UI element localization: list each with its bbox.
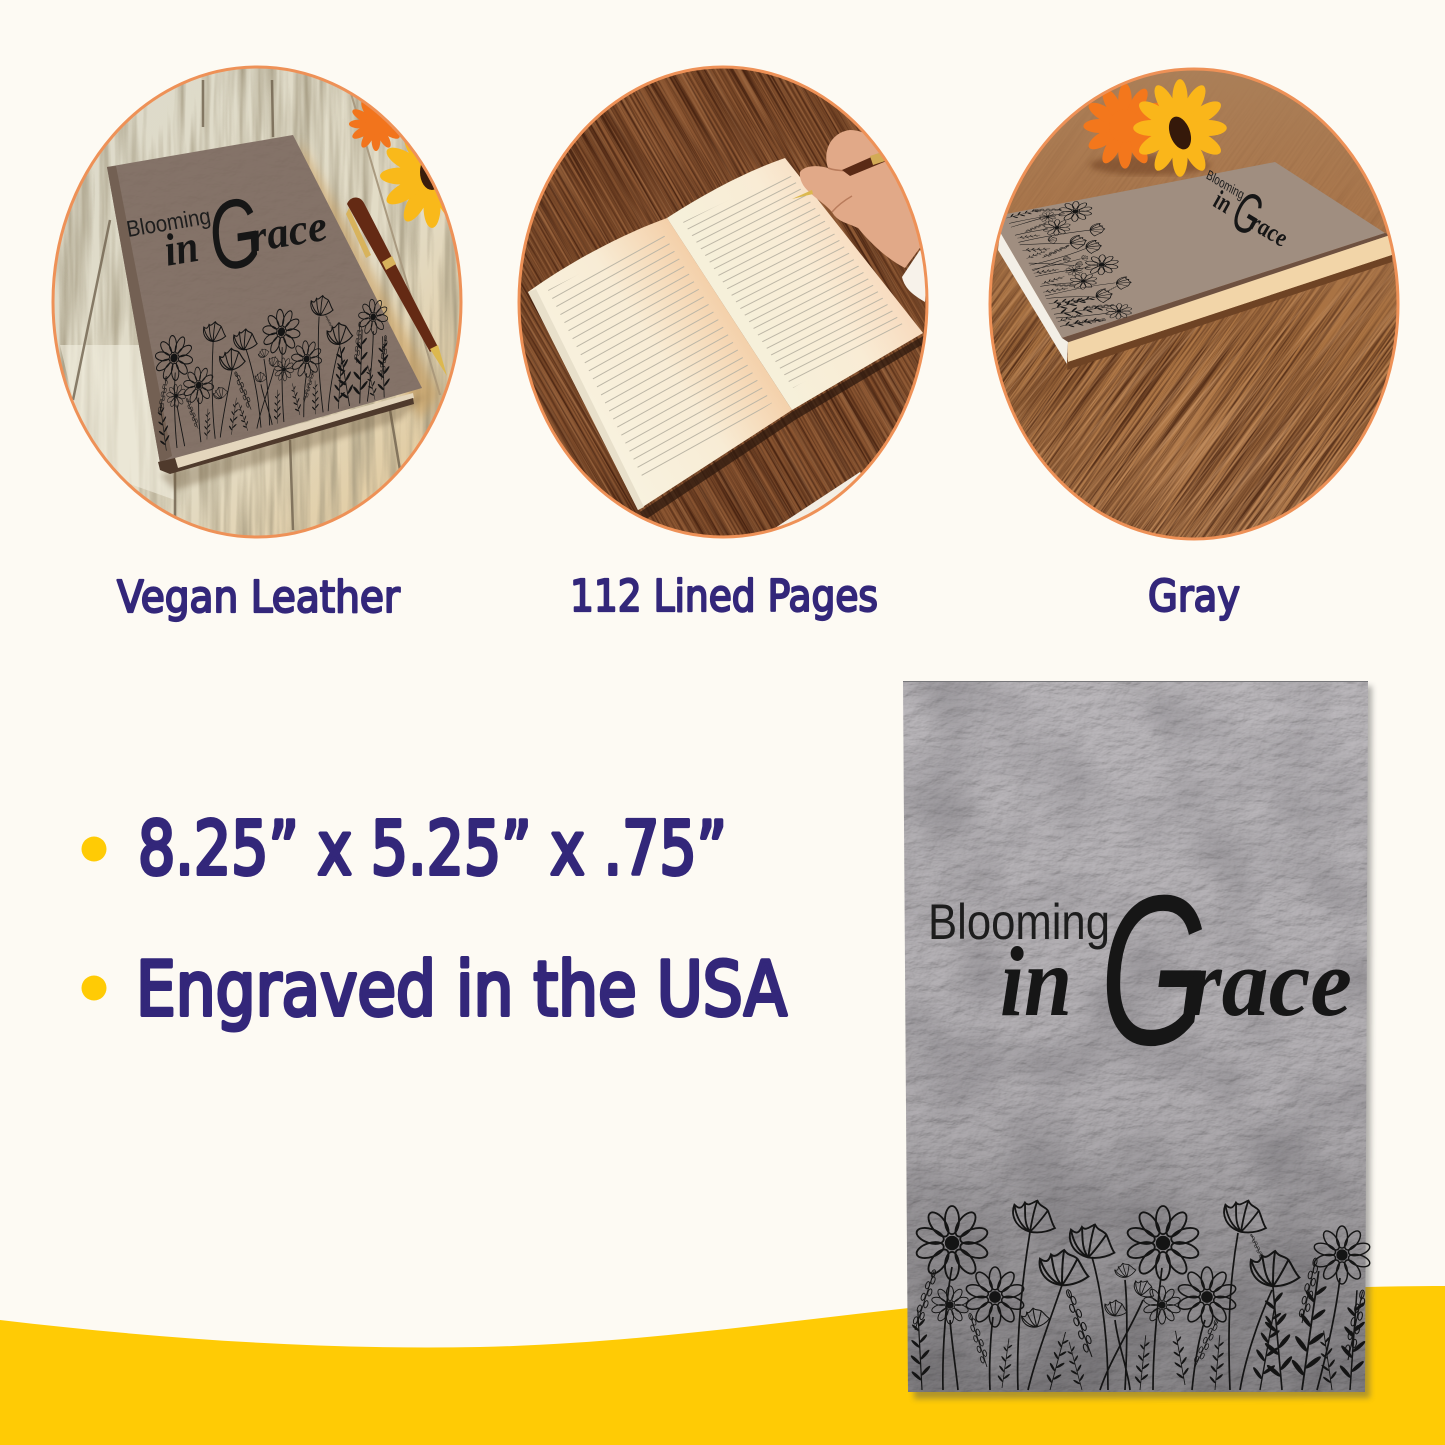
bullet: dimensions: 8.25” x 5.25” x .75” xyxy=(138,806,727,892)
cover title: race xyxy=(1185,929,1352,1036)
icon: hand holding pen xyxy=(792,130,928,302)
cover text: in xyxy=(1210,185,1235,220)
cover title: G xyxy=(1100,851,1208,1090)
ellipse outline xyxy=(53,67,461,537)
cover text: Blooming xyxy=(124,203,213,242)
cover flowers xyxy=(155,295,390,451)
cover text: G xyxy=(1225,177,1270,250)
caption: gray: Gray xyxy=(1148,571,1240,622)
caption: 112 lined pages: 112 Lined Pages xyxy=(570,571,878,622)
cover flowers xyxy=(1006,201,1132,328)
bullet: engraved in the USA: Engraved in the USA xyxy=(136,945,787,1033)
book: gray journal closed xyxy=(998,157,1392,370)
panel: lined pages photo xyxy=(518,66,928,538)
icon: orange flower xyxy=(1083,79,1227,177)
cover title: in xyxy=(1000,926,1072,1037)
leather cover xyxy=(903,681,1368,1392)
cover text: G xyxy=(200,176,269,292)
cover text xyxy=(127,198,326,269)
carpet corner xyxy=(776,472,861,528)
book: open lined journal xyxy=(528,158,923,510)
cover text: Blooming xyxy=(1204,167,1246,203)
cover text: race xyxy=(246,201,331,262)
panel: vegan leather photo xyxy=(50,60,484,540)
main gray journal xyxy=(903,681,1372,1399)
ellipse outline xyxy=(519,67,927,537)
cover title xyxy=(928,851,1352,1090)
ellipse outline xyxy=(990,69,1398,539)
cover text: race xyxy=(1247,207,1291,254)
cover title: Blooming xyxy=(928,894,1110,950)
cover text: in xyxy=(160,220,202,275)
cover wildflowers xyxy=(907,1197,1371,1392)
caption: vegan leather: Vegan Leather xyxy=(117,572,401,623)
icon: sunflower xyxy=(349,102,444,228)
book: brown leather journal xyxy=(100,130,430,474)
panel: gray colour photo xyxy=(988,68,1400,540)
icon: pen xyxy=(346,197,447,376)
yellow wave band xyxy=(0,1286,1445,1445)
cover text xyxy=(1206,170,1286,246)
